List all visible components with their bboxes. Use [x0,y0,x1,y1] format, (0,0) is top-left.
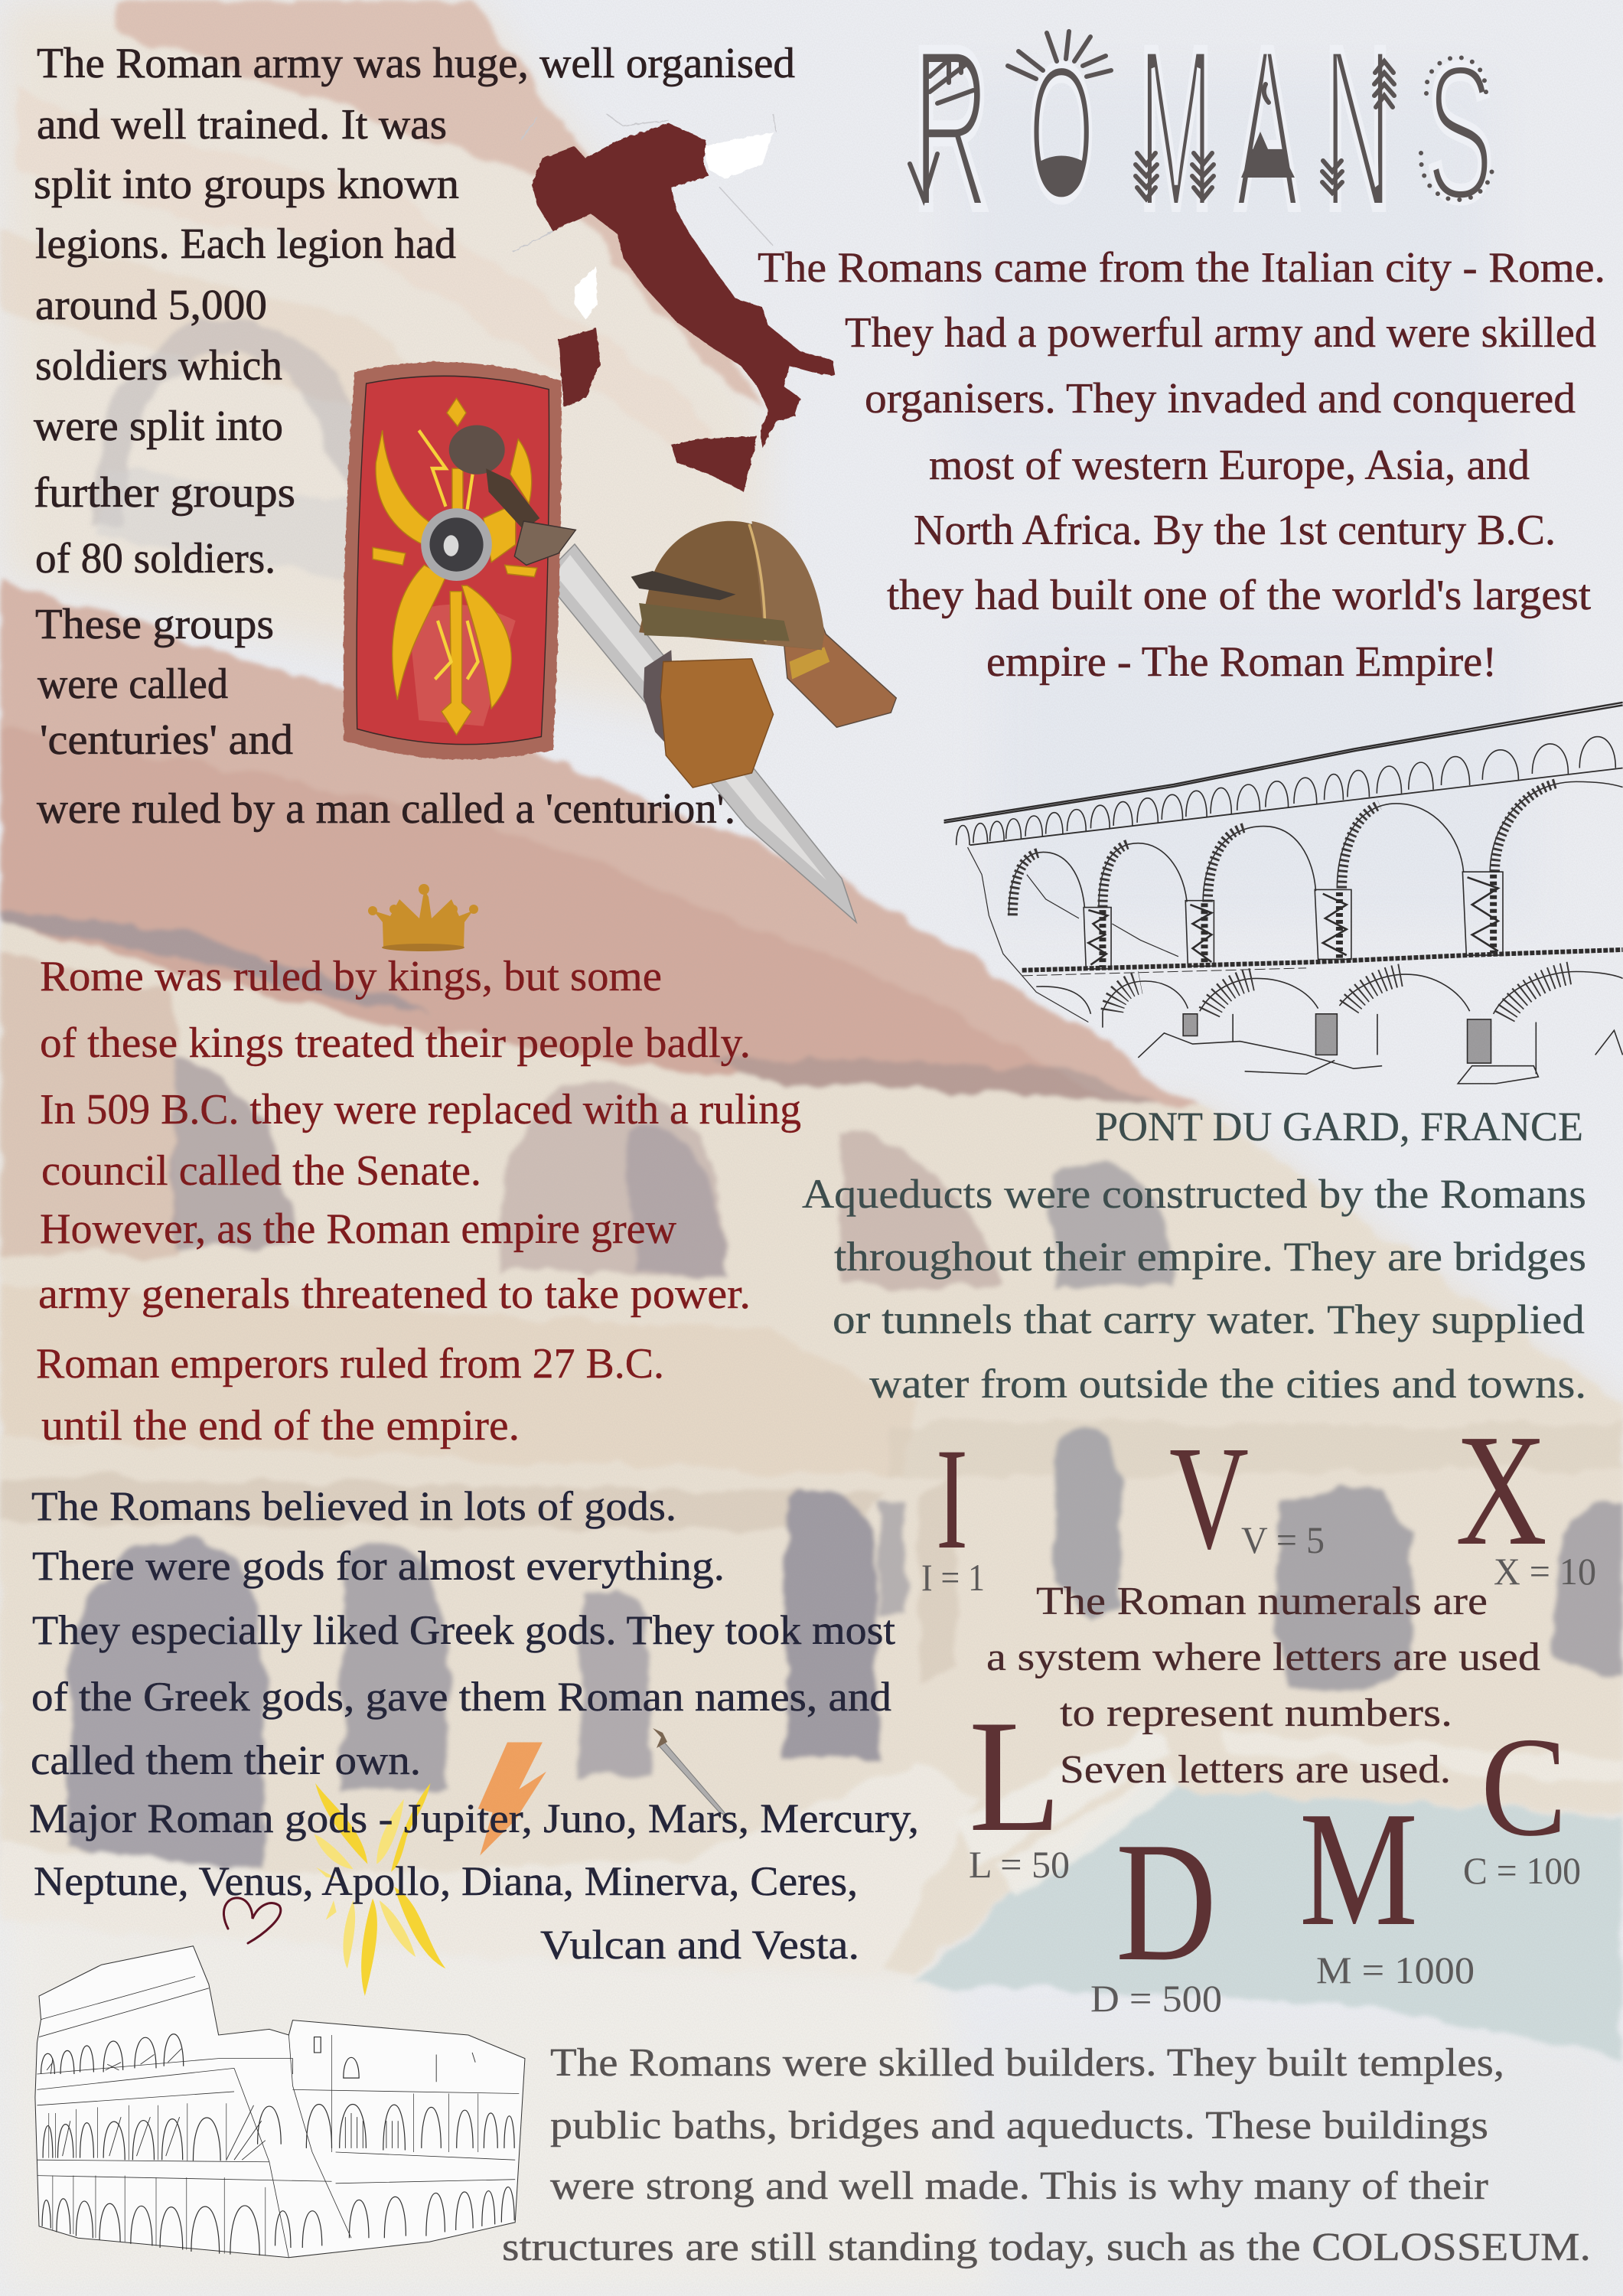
numeral value labels: I = 1 [921,1556,985,1599]
text block: rulers of Rome [36,953,801,1450]
text block: Roman army: and well trained. It was [37,101,447,148]
text block: where the Romans came from: organisers. They invaded and conquered [865,375,1576,422]
text block: rulers of Rome: However, as the Roman empire grew [40,1205,677,1253]
text block: Roman army: split into groups known [34,161,459,208]
text block: Roman gods: Neptune, Venus, Apollo, Diana, Minerva, Ceres, [34,1858,858,1904]
heading and text block: aqueducts: water from outside the cities and towns. [869,1361,1586,1407]
title: ROMANS: N [1324,0,1392,256]
text block: Roman builders: public baths, bridges and aqueducts. These buildings [550,2104,1488,2148]
text block: Roman gods: Major Roman gods - Jupiter, Juno, Mars, Mercury, [29,1795,919,1841]
title: ROMANS: R [912,0,990,256]
text block: Roman builders: were strong and well made. This is why many of their [550,2164,1488,2208]
text block: rulers of Rome: of these kings treated their people badly. [40,1019,751,1067]
illustration: Pont du Gard aqueduct sketch [944,703,1623,1084]
text block: Roman army: around 5,000 [35,282,267,329]
title: ROMANS: A [1236,0,1299,256]
text block: where the Romans came from: empire - The Roman Empire! [986,638,1497,686]
heading and text block: aqueducts: Aqueducts were constructed by the Romans [802,1171,1586,1217]
title: ROMANS [910,0,1494,257]
large Roman numeral letters: C [1481,1708,1567,1866]
large Roman numeral letters: X [1455,1402,1547,1579]
illustration: Roman shield [344,362,562,759]
numeral value labels: X = 10 [1494,1550,1596,1593]
large Roman numeral letters: I [936,1419,968,1580]
numeral value labels: C = 100 [1463,1849,1581,1892]
text block: Roman builders [502,2041,1591,2269]
heading and text block: aqueducts: or tunnels that carry water. They supplied [833,1296,1585,1342]
text block: where the Romans came from: most of western Europe, Asia, and [929,442,1530,489]
icon: heart for Venus [223,1898,281,1943]
numeral value labels [921,1518,1596,2020]
text block: Roman army: 'centuries' and [40,716,293,764]
icon: small sword for Mars [653,1728,727,1816]
illustration: gladius sword blade [543,544,856,922]
large Roman numeral letters [936,1402,1567,1997]
title: ROMANS: M [1139,1,1213,257]
large Roman numeral letters: V [1169,1415,1249,1580]
numeral value labels: D = 500 [1090,1977,1222,2020]
text block: where the Romans came from: North Africa. By the 1st century B.C. [914,507,1556,554]
text block: rulers of Rome: Rome was ruled by kings, but some [40,953,662,1000]
text block: Roman army: were split into [34,403,283,450]
title: ROMANS: O [1028,26,1094,240]
icon: lightning bolt for Jupiter [478,1742,546,1855]
text block: Roman numerals: The Roman numerals are [1036,1580,1488,1623]
text block: rulers of Rome: council called the Senate. [41,1147,481,1195]
text block: Roman numerals: a system where letters are used [986,1636,1540,1679]
text block: rulers of Rome: army generals threatened to take power. [38,1270,751,1318]
text block: rulers of Rome: Roman emperors ruled from 27 B.C. [36,1340,664,1388]
text block: Roman army: These groups [35,601,274,648]
illustration: sword hilt [449,425,575,565]
text block: Roman numerals: Seven letters are used. [1060,1748,1451,1792]
text block: Roman army [34,40,795,833]
text block: Roman army: legions. Each legion had [35,220,456,268]
text block: Roman army: The Roman army was huge, well organised [37,40,795,87]
numeral value labels: M = 1000 [1316,1949,1475,1991]
text block: where the Romans came from: they had built one of the world's largest [887,572,1591,619]
illustration: Colosseum sketch [35,1946,525,2258]
text block: Roman builders: The Romans were skilled builders. They built temples, [550,2041,1504,2085]
large Roman numeral letters: M [1299,1777,1418,1960]
text block: Roman gods: They especially liked Greek gods. They took most [32,1607,895,1653]
text block: Roman numerals [986,1580,1540,1792]
text block: Roman army: were ruled by a man called a 'centurion'. [37,785,735,833]
text block: Roman gods: called them their own. [31,1737,421,1783]
heading and text block: aqueducts: PONT DU GARD, FRANCE [1095,1104,1583,1150]
icon: crown [368,884,478,951]
text block: Roman gods: The Romans believed in lots of gods. [31,1483,676,1529]
text block: Roman gods: Vulcan and Vesta. [540,1922,859,1968]
text block: rulers of Rome: In 509 B.C. they were replaced with a ruling [40,1086,801,1133]
text block: Roman numerals: to represent numbers. [1060,1691,1452,1735]
text block: where the Romans came from: The Romans came from the Italian city - Rome. [758,244,1605,292]
text block: rulers of Rome: until the end of the empire. [41,1402,520,1450]
text block: Roman army: soldiers which [35,342,282,390]
text block: Roman gods: There were gods for almost everything. [32,1543,725,1589]
numeral value labels: L = 50 [969,1843,1070,1886]
text block: Roman gods [29,1483,919,1968]
large Roman numeral letters: D [1116,1807,1217,1997]
text block: where the Romans came from: They had a powerful army and were skilled [845,309,1596,357]
icon: sun for Apollo [314,1783,445,1996]
heading and text block: aqueducts [802,1104,1586,1407]
illustration: Roman helmet [631,521,896,788]
map: Italy [513,114,835,492]
large Roman numeral letters: L [969,1688,1061,1865]
text block: Roman army: further groups [34,469,295,517]
heading and text block: aqueducts: throughout their empire. They are bridges [834,1234,1586,1280]
text block: Roman army: of 80 soldiers. [35,535,275,582]
title: ROMANS: S [1426,24,1494,242]
text block: Roman army: were called [37,660,228,708]
text block: Roman builders: structures are still standing today, such as the COLOSSEUM. [502,2226,1591,2269]
text block: Roman gods: of the Greek gods, gave them Roman names, and [31,1674,891,1720]
numeral value labels: V = 5 [1241,1518,1325,1561]
text block: where the Romans came from [758,244,1605,686]
